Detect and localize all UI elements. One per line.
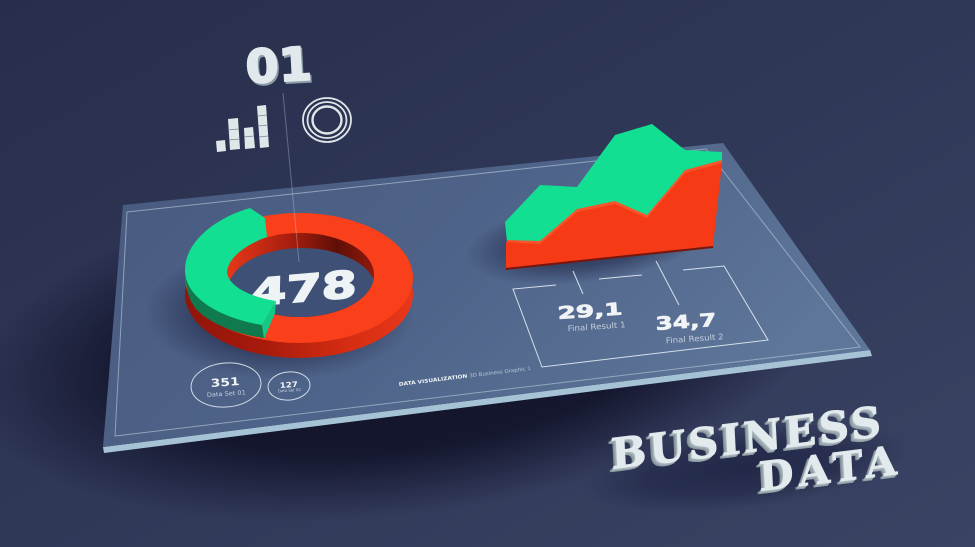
red area top edge: [507, 160, 722, 246]
stat circle 127: [267, 370, 311, 402]
heading number 01: 01: [244, 37, 313, 94]
green area: [505, 124, 722, 243]
panel shadow: [0, 124, 848, 547]
result 2: Final Result 2: [665, 332, 724, 345]
red area base: [506, 246, 713, 270]
chart: 3D area: [460, 124, 722, 299]
title shadow: [576, 408, 914, 528]
donut hole wall: [226, 233, 374, 317]
donut green top: [185, 208, 276, 325]
caption: data visualization: DATA VISUALIZATION: [399, 374, 468, 388]
red area: [506, 163, 722, 268]
results box frame: [513, 261, 768, 367]
panel inner frame: [115, 149, 860, 436]
caption: data visualization: [399, 366, 531, 388]
donut green side: [185, 270, 264, 338]
chart: donut: [145, 208, 415, 380]
stat circle 127: Data Set 02: [278, 387, 301, 393]
result 1: Final Result 1: [567, 320, 626, 333]
stat circle 351: 351: [210, 375, 240, 390]
donut red side: [185, 230, 413, 358]
donut green end face: [262, 301, 276, 339]
result 1: 29,1: [557, 300, 623, 324]
icon: concentric ring: [303, 98, 351, 142]
title: BUSINESS: BUSINESS: [610, 397, 885, 479]
title: DATA: DATA: [758, 436, 903, 501]
stat circle 127: 127: [280, 380, 298, 390]
panel surface: [103, 143, 870, 447]
stat circle 351: [189, 360, 263, 410]
donut value: 478: [251, 263, 357, 315]
heading number 01: 01: [246, 39, 314, 96]
result 2: 34,7: [655, 310, 717, 335]
panel edge: [103, 350, 872, 453]
caption: data visualization: 3D Business Graphic 1: [469, 366, 531, 379]
panel: dashboard board: [103, 143, 872, 453]
leader line: [283, 93, 299, 262]
area contact shadow: [460, 181, 720, 299]
icon: bar chart: [216, 105, 269, 152]
result 1: [557, 299, 626, 334]
donut contact shadow: [145, 244, 415, 380]
stat circle 351: Data Set 01: [207, 389, 246, 399]
result 2: [655, 309, 724, 346]
donut hole floor: [230, 248, 374, 317]
donut red top: [185, 213, 413, 343]
